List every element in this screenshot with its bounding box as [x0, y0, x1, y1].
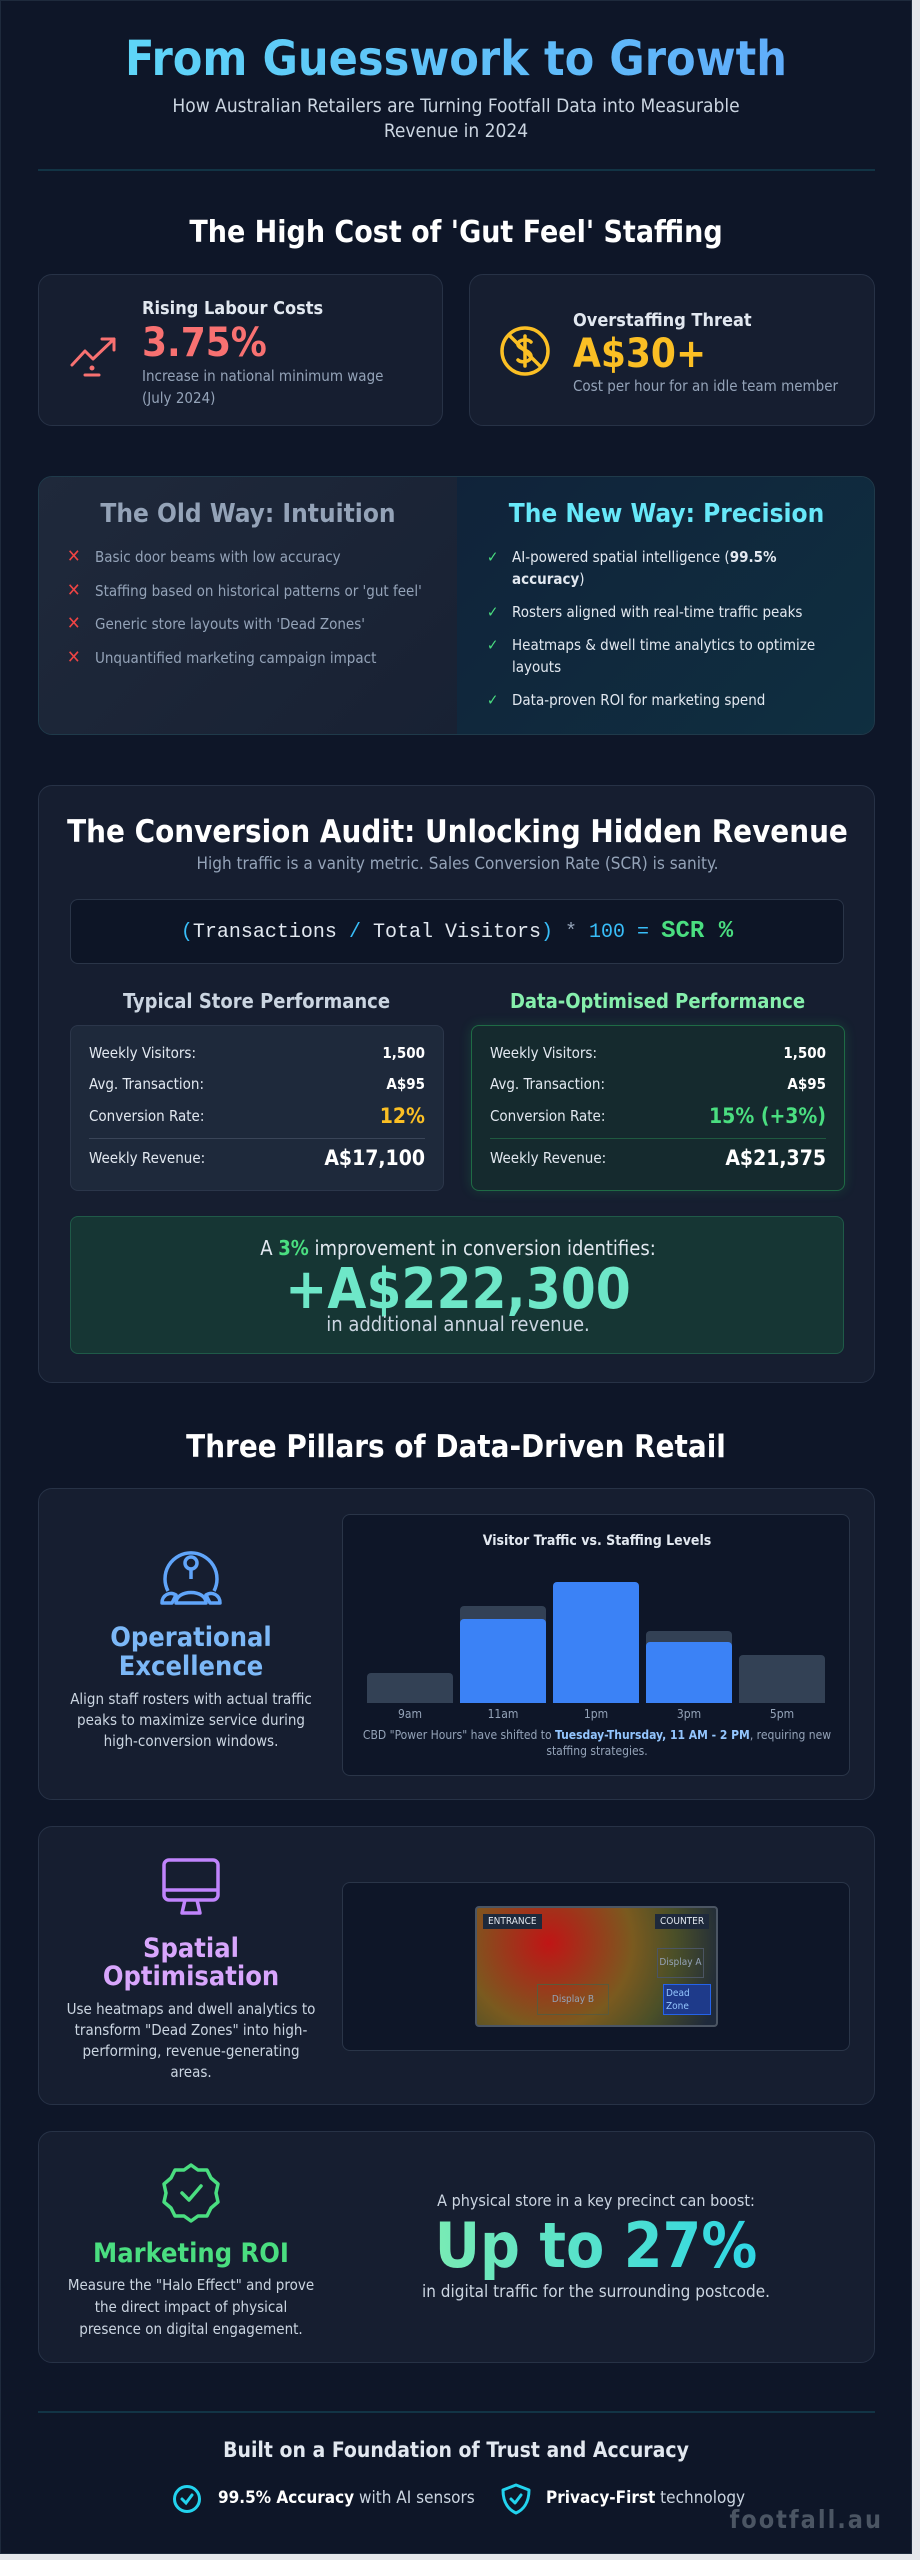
chart: traffic vs staffing: Visitor Traffic vs. Staffing Levels: [483, 1533, 711, 1549]
trust badges: Privacy-First technology: [546, 2488, 745, 2508]
icon: team: [160, 1551, 222, 1605]
text: labour stats: Increase in national minimum wage (July 2024): [142, 367, 383, 407]
trust badges: [173, 2484, 745, 2514]
table: optimised: Conversion Rate:: [490, 1107, 605, 1125]
list: new way: [487, 548, 815, 709]
panel: old vs new: [38, 476, 875, 735]
list: old way: ✕: [67, 647, 81, 668]
table: typical: A$17,100: [324, 1146, 425, 1170]
text: overstaffing stats: Cost per hour for an idle team member: [573, 377, 838, 395]
heading: new way: The New Way: Precision: [509, 499, 824, 529]
stat: up to 27%: A physical store in a key precinct can boost:: [437, 2191, 755, 2210]
subtitle: How Australian Retailers are Turning Footfall Data into Measurable Revenue in 2024: [172, 95, 740, 142]
heatmap: store floor: COUNTER: [660, 1916, 704, 1927]
list: new way: ✓: [487, 636, 498, 654]
list: new way: ✓: [487, 691, 498, 709]
heading: three pillars: Three Pillars of Data-Driven Retail: [186, 1429, 726, 1465]
chart: traffic vs staffing: 9am: [398, 1707, 422, 1721]
icon: badge check: [162, 2163, 220, 2223]
callout: revenue uplift: in additional annual revenue.: [326, 1312, 590, 1336]
heatmap: store floor: ENTRANCE: [488, 1916, 537, 1927]
subtitle: audit: High traffic is a vanity metric. Sales Conversion Rate (SCR) is sanity.: [197, 854, 718, 874]
text: labour stats: [142, 298, 383, 407]
text: spatial optimisation: [67, 1933, 315, 2081]
list: old way: ✕: [67, 546, 81, 567]
table: typical: Weekly Revenue:: [89, 1149, 205, 1167]
stat: up to 27%: Up to 27%: [435, 2209, 757, 2282]
text: overstaffing stats: A$30+: [573, 331, 706, 377]
text: marketing roi: [68, 2238, 314, 2338]
heading: high cost: The High Cost of 'Gut Feel' Staffing: [189, 215, 723, 250]
icon: shield: [502, 2484, 530, 2514]
text: overstaffing stats: Overstaffing Threat: [573, 310, 752, 331]
table: typical: 12%: [380, 1104, 425, 1128]
callout: revenue uplift: A 3% improvement in conversion identifies:: [260, 1236, 656, 1260]
text: overstaffing stats: [573, 310, 838, 395]
list: new way: Rosters aligned with real-time traffic peaks: [512, 603, 802, 621]
text: labour stats: Rising Labour Costs: [142, 298, 323, 319]
table: optimised: A$21,375: [725, 1146, 826, 1170]
text: operational excellence: Operational Excellence: [110, 1622, 272, 1682]
text: labour stats: 3.75%: [142, 320, 267, 366]
icon: monitor: [162, 1858, 220, 1915]
chart: traffic vs staffing: 3pm: [677, 1707, 701, 1721]
table: optimised: [471, 1025, 845, 1191]
list: new way: Data-proven ROI for marketing spend: [512, 691, 765, 709]
icon: no dollar: [500, 326, 550, 376]
title: From Guesswork to Growth: [125, 31, 787, 87]
text: marketing roi: Measure the "Halo Effect" and prove the direct impact of physical presence on digital engagement.: [68, 2276, 314, 2338]
heatmap: store floor: [342, 1882, 850, 2051]
panel: new way: [457, 477, 876, 736]
panel: old way: [39, 477, 457, 736]
card: overstaffing: [469, 274, 875, 426]
text: spatial optimisation: Use heatmaps and dwell analytics to transform "Dead Zones" into high-performing, revenue-generating areas.: [67, 2000, 315, 2081]
callout: revenue uplift: [70, 1216, 844, 1354]
list: new way: AI-powered spatial intelligence (99.5% accuracy): [512, 548, 777, 588]
chart: traffic vs staffing: 11am: [488, 1707, 518, 1721]
card: rising labour costs: [38, 274, 443, 426]
heading: conversion audit: The Conversion Audit: Unlocking Hidden Revenue: [67, 814, 848, 850]
stat: up to 27%: [422, 2191, 770, 2302]
text: operational excellence: Align staff rosters with actual traffic peaks to maximize service during high-conversion windows.: [70, 1690, 312, 1750]
list: old way: Staffing based on historical patterns or 'gut feel': [95, 582, 422, 600]
formula box: [70, 899, 844, 964]
table: typical: Avg. Transaction:: [89, 1075, 204, 1093]
chart: traffic vs staffing: [342, 1514, 850, 1776]
table: optimised: 15% (+3%): [709, 1104, 826, 1128]
table: optimised: A$95: [787, 1075, 826, 1093]
heatmap: store floor: Dead Zone: [666, 1988, 690, 2012]
icon: trend up: [70, 337, 116, 376]
table: optimised: Weekly Visitors:: [490, 1044, 597, 1062]
list: old way: ✕: [67, 613, 81, 634]
chart: traffic vs staffing: CBD "Power Hours" have shifted to Tuesday-Thursday, 11 AM - 2 PM, requiring new staffing strategies.: [363, 1728, 831, 1758]
heatmap: store floor: Display A: [659, 1957, 702, 1968]
table: typical: [70, 1025, 444, 1191]
text: spatial optimisation: Spatial Optimisation: [103, 1933, 279, 1992]
callout: revenue uplift: +A$222,300: [285, 1257, 631, 1322]
table: typical: A$95: [386, 1075, 425, 1093]
panel: conversion audit: [38, 785, 875, 1383]
list: new way: ✓: [487, 603, 498, 621]
text: marketing roi: Marketing ROI: [93, 2238, 289, 2269]
pillar: marketing roi: [38, 2131, 875, 2363]
table: typical: Conversion Rate:: [89, 1107, 204, 1125]
table: optimised: 1,500: [783, 1044, 826, 1062]
trust badges: 99.5% Accuracy with AI sensors: [218, 2488, 475, 2508]
list: old way: ✕: [67, 580, 81, 601]
heatmap: store floor: Display B: [552, 1994, 594, 2005]
table: typical: Weekly Visitors:: [89, 1044, 196, 1062]
list: new way: ✓: [487, 548, 498, 566]
table: optimised: Avg. Transaction:: [490, 1075, 605, 1093]
icon: check circle: [173, 2485, 201, 2513]
list: old way: [67, 546, 422, 668]
watermark: footfall.au: [729, 2505, 883, 2534]
heading: optimised: Data-Optimised Performance: [510, 989, 805, 1013]
list: old way: Generic store layouts with 'Dead Zones': [95, 615, 365, 633]
list: old way: Unquantified marketing campaign impact: [95, 649, 376, 667]
table: typical: 1,500: [382, 1044, 425, 1062]
table: optimised: Weekly Revenue:: [490, 1149, 606, 1167]
heading: trust: Built on a Foundation of Trust and Accuracy: [223, 2438, 689, 2462]
pillar: spatial optimisation: [38, 1826, 875, 2105]
stat: up to 27%: in digital traffic for the surrounding postcode.: [422, 2282, 770, 2302]
text: operational excellence: [70, 1622, 312, 1750]
chart: traffic vs staffing: 1pm: [584, 1707, 608, 1721]
chart: traffic vs staffing: 5pm: [770, 1707, 794, 1721]
formula box: (Transactions / Total Visitors) * 100 = SCR %: [181, 918, 733, 945]
pillar: operational excellence: [38, 1488, 875, 1800]
heading: typical: Typical Store Performance: [123, 989, 390, 1013]
list: new way: Heatmaps & dwell time analytics to optimize layouts: [512, 636, 815, 676]
list: old way: Basic door beams with low accuracy: [95, 548, 341, 566]
heading: old way: The Old Way: Intuition: [100, 499, 396, 529]
